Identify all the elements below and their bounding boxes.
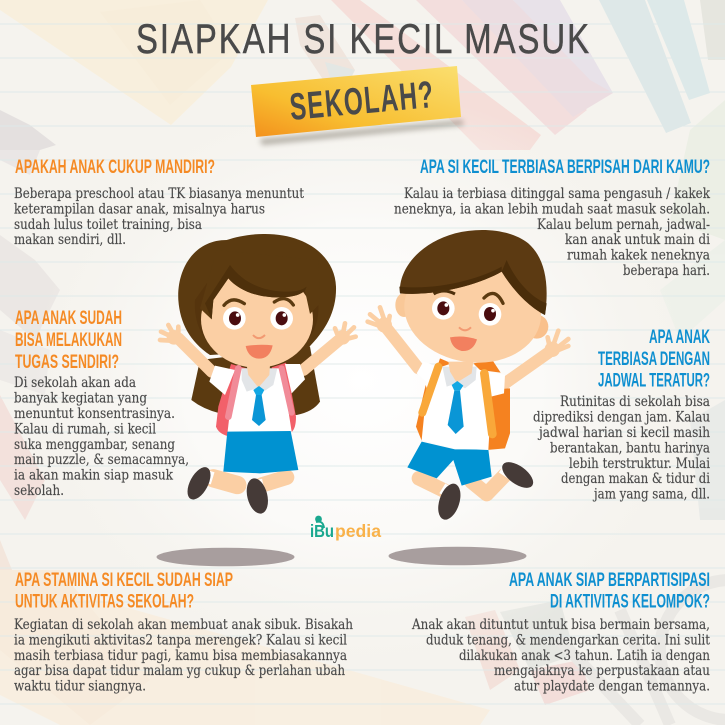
body text: makan sendiri, dll. xyxy=(14,232,126,248)
shadow under girl xyxy=(156,548,294,566)
logo: iBupedia: pedia xyxy=(335,521,381,541)
body text: kan anak untuk main di xyxy=(565,232,711,248)
body text: Di sekolah akan ada xyxy=(14,375,136,391)
body text: beberapa hari. xyxy=(623,263,710,279)
heading: APA STAMINA SI KECIL SUDAH SIAP xyxy=(15,570,233,591)
body text: Rutinitas di sekolah bisa xyxy=(560,394,710,410)
body text: ia akan makin siap masuk xyxy=(14,468,174,484)
logo: iBupedia: iBu xyxy=(310,521,334,541)
heading: BISA MELAKUKAN xyxy=(15,330,122,351)
heading xyxy=(15,570,233,612)
body text: banyak kegiatan yang xyxy=(14,390,147,406)
sticky note: SEKOLAH?: SEKOLAH? xyxy=(288,74,436,129)
body text: sudah lulus toilet training, bisa xyxy=(14,217,202,233)
panel: apa anak siap berpartisipasi xyxy=(411,570,710,695)
body text: rumah kakek neneknya xyxy=(567,248,710,264)
heading: APA ANAK SUDAH xyxy=(15,308,122,329)
heading: APAKAH ANAK CUKUP MANDIRI? xyxy=(15,157,215,178)
body text: Kegiatan di sekolah akan membuat anak sibuk. Bisakah xyxy=(14,617,353,633)
title: SIAPKAH SI KECIL MASUK xyxy=(136,15,591,62)
body text: sekolah. xyxy=(14,483,64,499)
heading xyxy=(509,570,710,612)
body text xyxy=(14,617,353,695)
body text: main puzzle, & semacamnya, xyxy=(14,452,189,468)
panel: apa anak sudah bisa melakukan tugas sendiri xyxy=(14,308,189,499)
body text xyxy=(14,375,189,499)
body text: keterampilan dasar anak, misalnya harus xyxy=(14,201,265,217)
panel: apa anak terbiasa dengan jadwal teratur xyxy=(533,327,711,503)
body text: jam yang sama, dll. xyxy=(592,487,710,503)
body text: suka menggambar, senang xyxy=(14,437,175,453)
panel: apa stamina si kecil sudah siap xyxy=(14,570,353,695)
body text xyxy=(14,186,304,248)
body text: waktu tidur siangnya. xyxy=(14,679,146,695)
body text: menuntut konsentrasinya. xyxy=(14,406,175,422)
body text: jadwal harian si kecil masih xyxy=(537,425,710,441)
heading xyxy=(15,308,122,373)
body text: ia mengikuti aktivitas2 tanpa merengek? Kalau si kecil xyxy=(14,632,347,648)
body text: lebih terstruktur. Mulai xyxy=(569,456,711,472)
illustration: girl jumping xyxy=(160,234,356,516)
panel: apakah anak cukup mandiri xyxy=(14,157,304,248)
body text xyxy=(533,394,711,503)
body text xyxy=(411,617,710,695)
shadow under boy xyxy=(388,547,526,565)
sticky note: SEKOLAH? xyxy=(251,66,464,145)
body text xyxy=(394,186,711,279)
heading xyxy=(598,327,710,392)
body text: Kalau di rumah, si kecil xyxy=(14,421,156,437)
illustration: boy jumping xyxy=(368,230,568,523)
panel: apa si kecil terbiasa berpisah xyxy=(394,157,711,279)
heading: TUGAS SENDIRI? xyxy=(15,352,119,373)
body text: Beberapa preschool atau TK biasanya menuntut xyxy=(14,186,304,202)
body text: masih terbiasa tidur pagi, kamu bisa membiasakannya xyxy=(14,648,347,664)
logo: iBupedia xyxy=(310,516,381,541)
body text: agar bisa dapat tidur malam yg cukup & perlahan ubah xyxy=(14,663,345,679)
heading: UNTUK AKTIVITAS SEKOLAH? xyxy=(15,592,194,612)
